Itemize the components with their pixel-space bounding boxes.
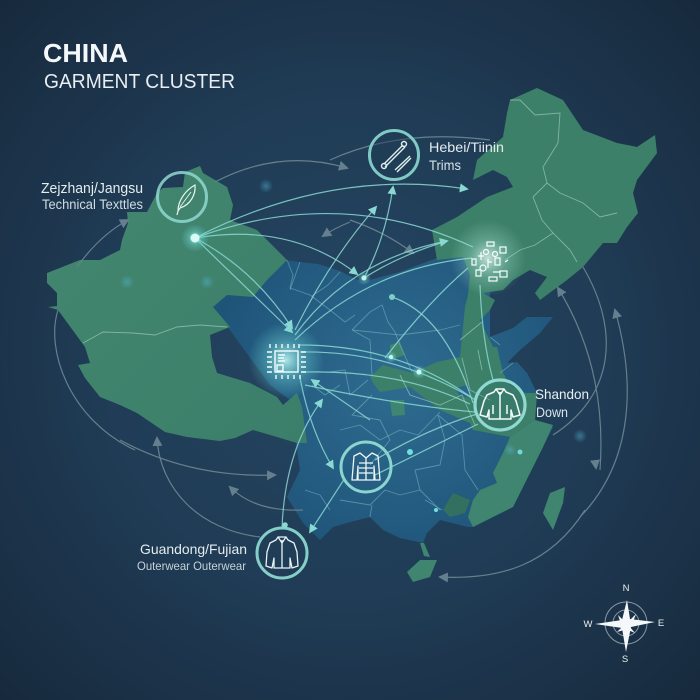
Hainan island: [407, 543, 437, 582]
south-east green region: [468, 420, 553, 527]
icon: chip hub: [248, 322, 324, 398]
compass rose: W: [584, 619, 593, 630]
compass rose: S: [622, 654, 628, 665]
icon: down jacket ring: [475, 380, 525, 430]
compass rose: N: [623, 583, 630, 594]
glowing nodes: [120, 179, 587, 512]
icon: trims ring: [370, 130, 418, 180]
title: [43, 38, 235, 93]
icon: padded jacket ring: [341, 442, 391, 492]
title: GARMENT CLUSTER: [44, 71, 235, 93]
label: Zhejiang/Jiangsu: [41, 181, 143, 212]
dark green patch: [443, 493, 470, 517]
map of China: [47, 88, 657, 582]
label: Guangdong/Fujian: Outerwear Outerwear: [137, 559, 246, 573]
label: Hebei/Tianjin: Hebei/Tiinin: [429, 139, 504, 155]
icon: Beijing trims cluster: [450, 220, 526, 296]
grey background arrows: [55, 137, 627, 577]
compass rose: E: [658, 618, 664, 629]
teal flow arrows: [195, 184, 493, 532]
label: Guangdong/Fujian: [137, 541, 247, 573]
north-east green region: [370, 88, 657, 437]
icon: feather cluster ring: [158, 172, 206, 222]
Taiwan island: [543, 487, 565, 530]
label: Shandong: Shandon: [535, 386, 589, 402]
western green region: [47, 166, 307, 443]
label: Zhejiang/Jiangsu: Zejzhanj/Jangsu: [41, 181, 143, 197]
label: Guangdong/Fujian: Guandong/Fujian: [140, 541, 247, 557]
blue inlet: [455, 385, 472, 398]
label: Hebei/Tianjin: Trims: [429, 157, 461, 173]
label: Zhejiang/Jiangsu: Technical Texttles: [42, 197, 143, 212]
label: Hebei/Tianjin: [429, 139, 504, 173]
icon: outerwear jacket ring: [257, 522, 307, 578]
label: Shandong: Down: [536, 404, 568, 420]
province borders: [287, 260, 513, 517]
central blue provinces: [213, 257, 553, 543]
label: Shandong: [535, 386, 589, 420]
small green patches: [390, 342, 405, 416]
compass rose: [584, 583, 664, 665]
title: CHINA: [43, 38, 128, 68]
